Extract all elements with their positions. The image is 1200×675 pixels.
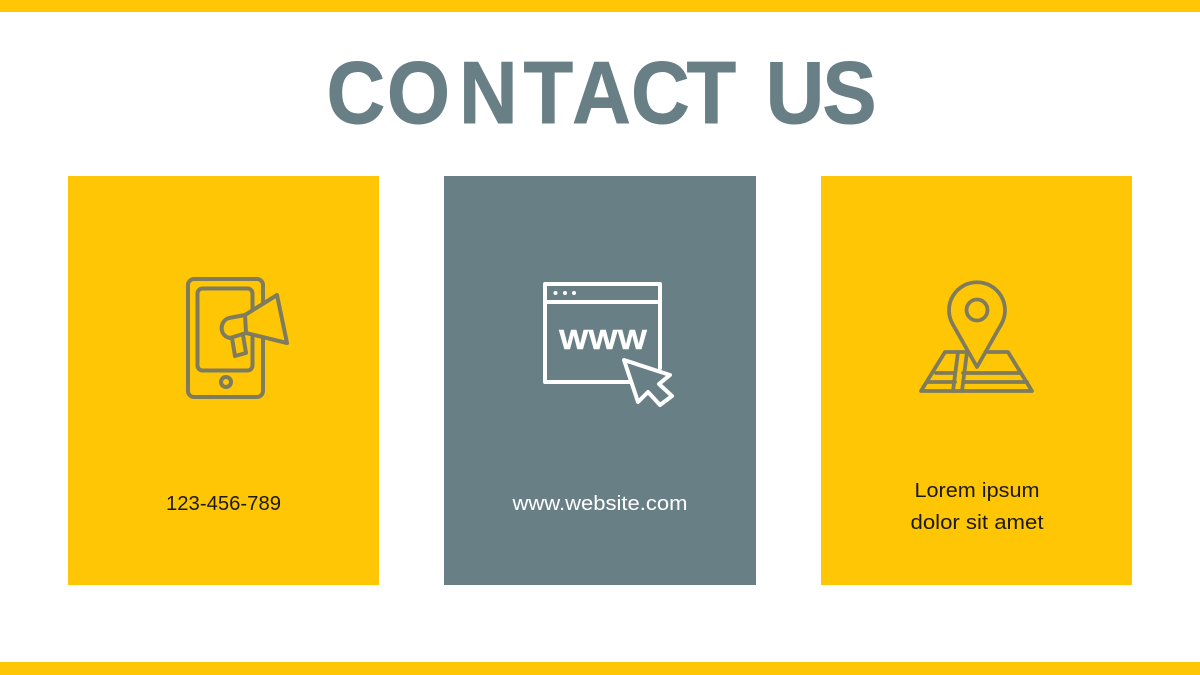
icon: map with location pin (921, 282, 1032, 391)
bottom yellow bar (0, 662, 1200, 675)
panel: address (821, 176, 1132, 585)
top yellow bar (0, 0, 1200, 12)
panel: website (444, 176, 756, 585)
address text: dolor sit amet (910, 512, 1044, 534)
icon: browser window with cursor (545, 284, 672, 405)
address text (910, 480, 1044, 534)
phone number: 123-456-789 (166, 493, 281, 515)
title: CONTACT US (327, 43, 876, 142)
www label: WWW (559, 324, 648, 355)
icon: phone with megaphone (188, 279, 287, 397)
browser dots (554, 291, 576, 295)
website address: www.website.com (511, 493, 688, 515)
address text: Lorem ipsum (914, 480, 1040, 502)
panel: phone (68, 176, 379, 585)
